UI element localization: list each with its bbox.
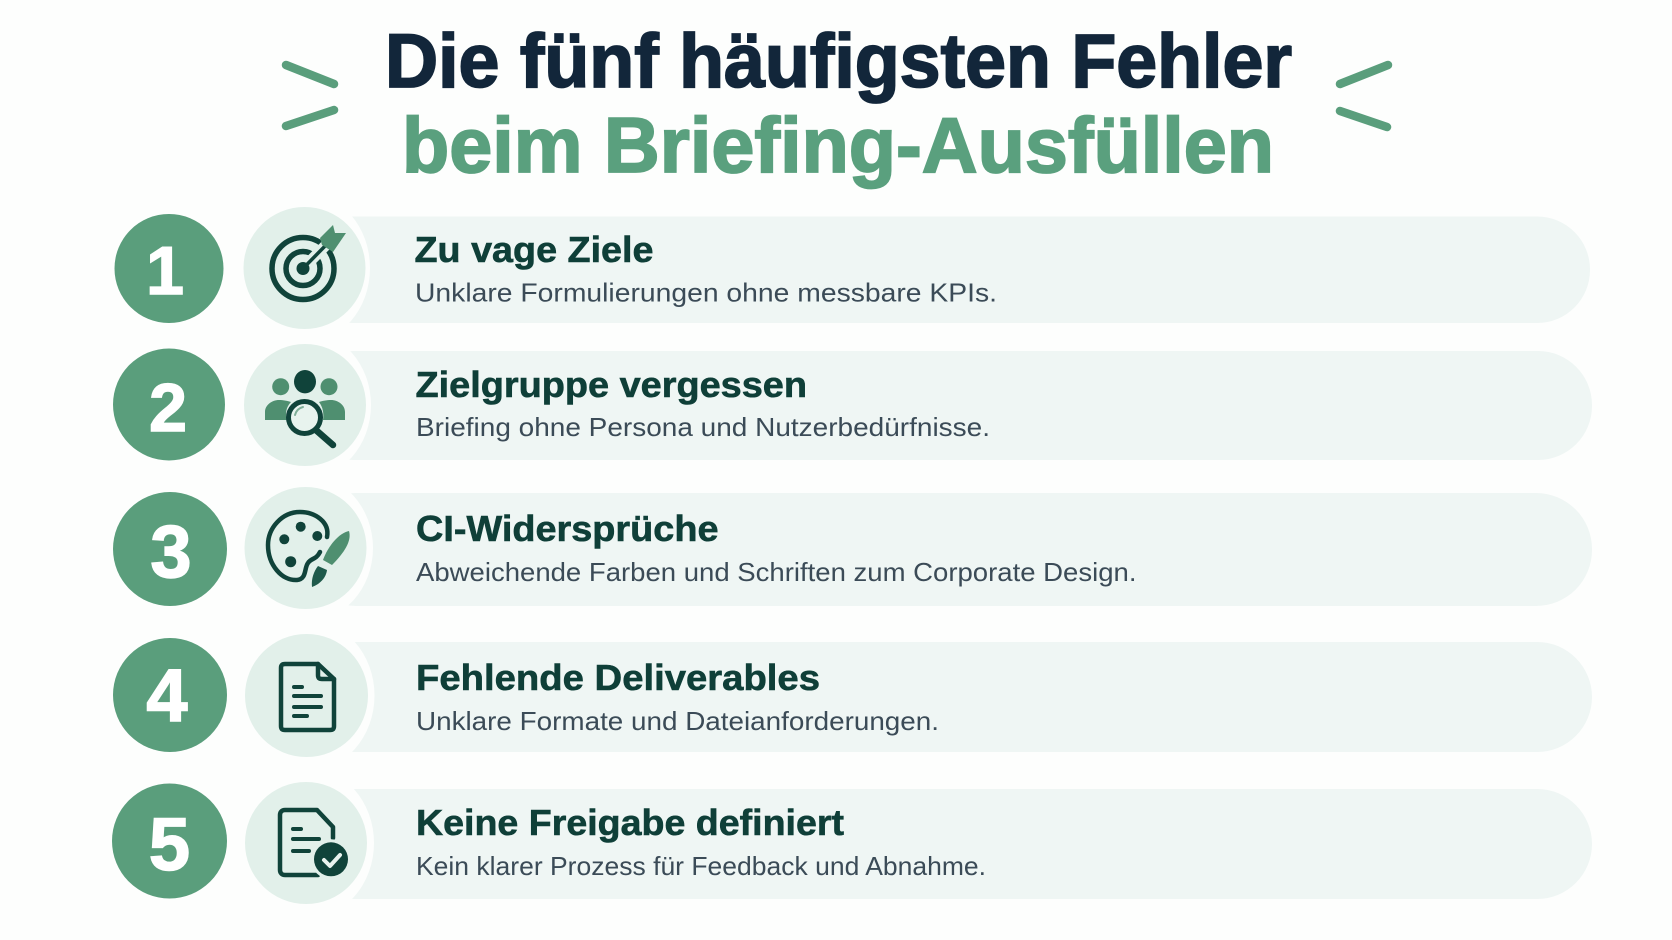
- icon badge: target: [240, 193, 370, 343]
- number badge 3: 3: [150, 510, 192, 593]
- decorative accent marks left: [286, 65, 334, 126]
- item 3 description: Abweichende Farben und Schriften zum Corporate Design.: [416, 557, 1136, 587]
- item 5: Keine Freigabe definiert: [112, 767, 1592, 919]
- number badge 4: 4: [146, 654, 188, 737]
- item 4: Fehlende Deliverables: [113, 620, 1592, 772]
- number badge 2: 2: [149, 370, 187, 446]
- number badge 3: [113, 492, 227, 606]
- item 2 heading: Zielgruppe vergessen: [416, 364, 807, 405]
- title line 1: Die fünf häufigsten Fehler: [385, 19, 1292, 104]
- item 5 description: Kein klarer Prozess für Feedback und Abnahme.: [416, 851, 986, 881]
- number badge 1: [114, 214, 224, 323]
- number badge 1: 1: [146, 233, 184, 309]
- icon badge: audience search: [239, 331, 371, 479]
- number badge 5: 5: [149, 803, 190, 886]
- title: [385, 19, 1292, 189]
- item 2: Zielgruppe vergessen: [113, 331, 1592, 479]
- item 3: CI-Widersprüche: [113, 474, 1592, 622]
- item 1 description: Unklare Formulierungen ohne messbare KPIs.: [415, 278, 997, 308]
- number badge 2: [113, 348, 225, 460]
- icon badge: palette and brush: [239, 474, 373, 622]
- item 4 description: Unklare Formate und Dateianforderungen.: [416, 706, 939, 736]
- panel: row 3 background: [300, 493, 1592, 606]
- item 1: Zu vage Ziele: [114, 193, 1590, 343]
- icon badge: approved document: [238, 767, 374, 919]
- panel: row 4 background: [300, 642, 1592, 752]
- number badge 5: [112, 784, 227, 898]
- item 5 heading: Keine Freigabe definiert: [416, 802, 844, 843]
- item 2 description: Briefing ohne Persona und Nutzerbedürfnisse.: [416, 412, 990, 442]
- panel: row 2 background: [300, 351, 1592, 460]
- item 1 heading: Zu vage Ziele: [414, 229, 654, 270]
- panel: row 1 background: [300, 216, 1590, 323]
- item 3 heading: CI-Widersprüche: [416, 508, 718, 549]
- panel: row 5 background: [300, 789, 1592, 899]
- number badge 4: [113, 638, 227, 752]
- icon badge: document: [238, 620, 374, 772]
- item 4 heading: Fehlende Deliverables: [416, 657, 820, 698]
- decorative accent marks right: [1340, 65, 1388, 127]
- title line 2: beim Briefing-Ausfüllen: [402, 101, 1274, 189]
